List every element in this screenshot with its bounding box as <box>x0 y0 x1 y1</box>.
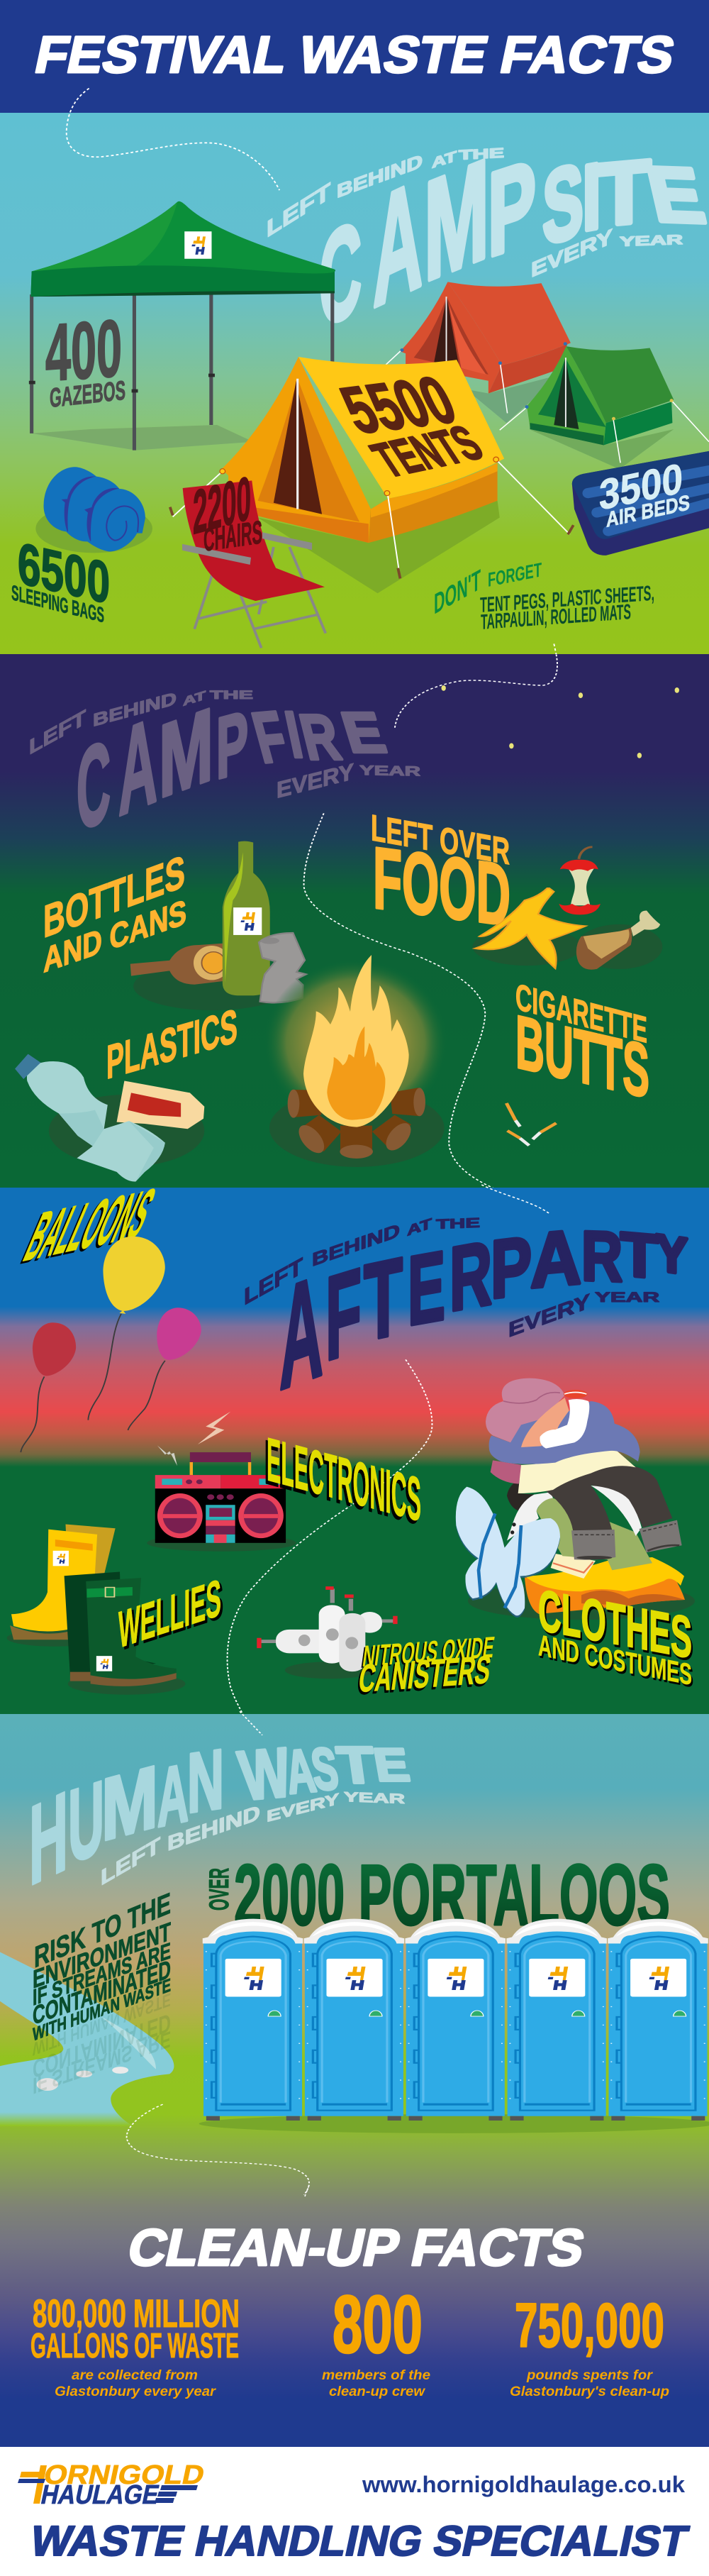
label: 6500 sleeping bags <box>11 530 110 628</box>
heading: human waste left behind every year: A <box>281 1737 320 1807</box>
icon: boombox <box>147 1412 296 1552</box>
icon: crushed plastics <box>15 1054 204 1182</box>
label: 3500 air beds: AIR BEDS <box>606 491 690 532</box>
stat: 800,000 million gallons: are collected from <box>72 2368 198 2383</box>
heading: left behind at the afterparty every year: LEFT <box>244 1253 303 1310</box>
dotted trail <box>127 1711 309 2195</box>
heading: left behind at the afterparty every year: A <box>530 1214 581 1305</box>
heading: left behind at the campsite every year: P <box>488 135 536 282</box>
heading: left behind at the campfire every year: P <box>216 693 248 798</box>
label: 5500 tents <box>330 363 493 487</box>
stat: 800 crew: clean-up crew <box>329 2384 425 2399</box>
label: over 2000 portaloos: OVER <box>204 1868 235 1911</box>
heading: left behind at the afterparty every year: Y <box>656 1223 688 1286</box>
heading: left behind at the campsite every year: AT <box>432 148 457 172</box>
icon: banana peel <box>473 888 586 968</box>
label: bottles and cans <box>43 846 186 980</box>
heading: left behind at the afterparty every year: THE <box>436 1216 480 1232</box>
stat: 800,000 million gallons: GALLONS OF WASTE <box>30 2327 239 2365</box>
panel: human waste <box>0 1711 709 2206</box>
heading: left behind at the campsite every year: EVERY <box>531 225 613 282</box>
dotted trail <box>304 654 557 1191</box>
stat: 800 crew: 800 <box>333 2279 423 2370</box>
heading: human waste left behind every year: A <box>157 1746 189 1845</box>
stat: 750,000 pounds: pounds spents for <box>526 2368 654 2383</box>
heading: left behind at the afterparty every year: R <box>450 1222 492 1331</box>
label: nitrous oxide canisters: CANISTERS <box>356 1647 493 1701</box>
heading: left behind at the afterparty every year: T <box>364 1234 403 1364</box>
heading: left behind at the campsite every year: THE <box>459 146 504 163</box>
heading: left behind at the campsite every year: M <box>424 128 489 311</box>
heading: left behind at the afterparty every year: A <box>279 1244 323 1421</box>
illustrations: stream <box>0 1711 309 2195</box>
illustrations: campfire <box>15 654 679 1191</box>
label: nitrous oxide canisters: NITROUS OXIDE <box>359 1632 495 1674</box>
heading: left behind at the campfire every year: M <box>159 685 213 820</box>
heading: human waste left behind every year: S <box>308 1736 342 1802</box>
label: 6500 sleeping bags: SLEEPING BAGS <box>11 580 104 628</box>
panel: campsite: CHAIRS <box>203 514 262 558</box>
icon: deck chair <box>182 480 325 648</box>
icon: green wellies <box>65 1571 185 1695</box>
heading: left behind at the afterparty every year: EVERY <box>508 1290 590 1342</box>
label: plastics: PLASTICS <box>106 999 238 1090</box>
icon: crushed can <box>259 933 306 1002</box>
icon: red tent <box>384 282 571 423</box>
stat: 800,000 million gallons <box>30 2291 240 2399</box>
text block: risk to the environment: RISK TO THE <box>34 1886 171 1975</box>
heading: left behind at the campfire every year: AT <box>183 687 206 709</box>
stat: 800 crew <box>322 2279 430 2399</box>
label: don't forget <box>434 558 654 634</box>
heading: left behind at the campfire every year: E <box>335 702 392 765</box>
icon: yellow wellies <box>7 1524 116 1647</box>
icon: green tent <box>500 342 709 469</box>
stat: 800,000 million gallons: Glastonbury every year <box>55 2384 217 2399</box>
logo: hornigold haulage: ORNIGOLD <box>41 2460 207 2490</box>
label: left over food: FOOD <box>373 829 510 945</box>
heading: left behind at the campsite every year: LEFT <box>267 177 330 243</box>
icon: portaloo 1 <box>203 1919 303 2121</box>
panel: campsite <box>0 89 709 656</box>
panel: afterparty <box>0 1173 709 1714</box>
text block: risk to the environment: CONTAMINATED <box>33 1954 171 2030</box>
heading: left behind at the campfire every year: EVERY <box>277 758 354 803</box>
heading: human waste left behind every year: EVERY <box>267 1790 339 1825</box>
tagline: WASTE HANDLING SPECIALIST <box>26 2517 693 2565</box>
icon: chicken leg <box>576 911 662 970</box>
heading: left behind at the campfire every year: THE <box>210 688 253 702</box>
label: left over food: LEFT OVER <box>371 807 510 873</box>
panel: footer <box>0 2447 709 2576</box>
label: 400 gazebos <box>45 304 125 414</box>
label: cigarette butts <box>515 976 649 1114</box>
label: bottles and cans: AND CANS <box>43 892 186 980</box>
label: nitrous oxide canisters: NITROUS OXIDE <box>361 1630 496 1673</box>
heading: clean-up facts: CLEAN-UP FACTS <box>123 2218 590 2277</box>
heading: human waste left behind every year: T <box>334 1736 379 1794</box>
heading: left behind at the campfire every year: I <box>279 698 308 771</box>
panel: afterparty: WELLIES <box>118 1568 221 1659</box>
panel: afterparty: WELLIES <box>121 1570 223 1662</box>
icon: pile of clothes <box>456 1378 695 1620</box>
icon: balloons <box>21 1237 201 1452</box>
text block: risk to the environment: IF STREAMS ARE <box>33 1937 171 2011</box>
heading: left behind at the afterparty every year <box>244 1214 688 1421</box>
label: don't forget: DON'T <box>434 563 481 621</box>
heading: left behind at the campfire every year: R <box>294 702 347 773</box>
icon: bottles <box>130 841 291 1010</box>
label: 2200 chairs <box>193 463 262 558</box>
heading: left behind at the afterparty every year: P <box>491 1219 532 1316</box>
heading: human waste left behind every year <box>29 1732 413 1910</box>
logo: hornigold haulage <box>18 2460 207 2510</box>
label: nitrous oxide canisters: CANISTERS <box>354 1649 492 1703</box>
text reflection in stream: CONTAMINATED <box>33 2008 171 2084</box>
label: left over food <box>371 807 510 945</box>
dotted trail end <box>305 2185 309 2196</box>
label: nitrous oxide canisters <box>354 1630 496 1703</box>
heading: human waste left behind every year: M <box>101 1747 158 1860</box>
dotted trail end <box>554 643 557 656</box>
icon: stars <box>441 685 679 758</box>
heading: left behind at the campsite every year: C <box>319 192 362 356</box>
logo: hornigold haulage: HAULAGE <box>38 2480 162 2510</box>
heading: human waste left behind every year: LEFT <box>101 1833 160 1890</box>
header band <box>0 0 709 113</box>
icon: cigarette butts <box>506 1103 556 1146</box>
icon: gazebo <box>29 201 335 450</box>
panel: afterparty: BALLOONS <box>15 1173 165 1277</box>
heading: left behind at the afterparty every year: R <box>581 1216 623 1296</box>
portaloos row <box>199 1919 709 2133</box>
label: 2200 chairs: 2200 <box>193 463 251 548</box>
icon: yellow tent <box>170 357 574 593</box>
icon: portaloo 2 <box>304 1919 404 2121</box>
text reflection in stream: IF STREAMS ARE <box>33 2026 171 2099</box>
label: 400 gazebos: GAZEBOS <box>50 376 125 414</box>
illustrations: afterparty <box>7 1185 549 1714</box>
stat: 750,000 pounds <box>510 2290 669 2399</box>
icon: nitrous oxide canisters <box>259 1588 396 1679</box>
heading: left behind at the campfire every year: F <box>245 696 295 778</box>
heading: left behind at the afterparty every year: E <box>408 1231 445 1347</box>
heading: left behind at the afterparty every year: F <box>325 1243 362 1386</box>
icon: portaloo 4 <box>506 1919 607 2121</box>
panel: afterparty: BALLOONS <box>13 1176 163 1279</box>
heading: left behind at the campsite every year: YEAR <box>620 233 683 250</box>
stat: 800 crew: members of the <box>322 2368 430 2383</box>
heading: left behind at the campsite every year <box>267 128 709 356</box>
label: 5500 tents: TENTS <box>362 416 493 487</box>
illustrations: campsite <box>29 89 709 656</box>
panel: clean-up facts <box>0 2185 709 2447</box>
heading: left behind at the afterparty every year: YEAR <box>595 1290 659 1305</box>
title: FESTIVAL WASTE FACTS <box>30 26 680 84</box>
label: 3500 air beds: 3500 <box>599 454 683 519</box>
dotted trail <box>67 89 279 190</box>
stat: 800,000 million gallons: 800,000 MILLION <box>33 2291 240 2335</box>
heading: left behind at the campsite every year: BEHIND <box>337 150 423 202</box>
heading: left behind at the campsite every year: I <box>582 143 601 250</box>
label: balloons <box>13 1173 165 1279</box>
heading: left behind at the afterparty every year: AT <box>407 1215 432 1239</box>
heading: left behind at the campsite every year: E <box>640 152 709 239</box>
heading: human waste left behind every year: U <box>68 1758 104 1885</box>
heading: left behind at the campfire every year: YEAR <box>359 763 420 780</box>
heading: left behind at the campfire every year: LEFT <box>29 705 86 760</box>
heading: left behind at the campsite every year: T <box>597 143 651 245</box>
label: don't forget: FORGET <box>488 558 542 591</box>
heading: left behind at the afterparty every year: T <box>620 1220 659 1292</box>
heading: left behind at the campfire every year: BEHIND <box>93 689 177 731</box>
icon: air bed <box>572 451 709 555</box>
label: 6500 sleeping bags: 6500 <box>18 530 110 617</box>
heading: human waste left behind every year: E <box>370 1739 413 1791</box>
text block: risk to the environment <box>33 1886 171 2045</box>
label: 400 gazebos: 400 <box>45 304 122 399</box>
heading: left behind at the campsite every year: A <box>373 146 423 340</box>
heading: human waste left behind every year: YEAR <box>344 1790 405 1807</box>
panel: campfire <box>0 654 709 1191</box>
heading: left behind at the afterparty every year: BEHIND <box>312 1220 400 1271</box>
icon: apple core <box>559 847 601 914</box>
label: 5500 tents: 5500 <box>330 363 468 447</box>
text reflection in stream <box>33 1989 171 2099</box>
text reflection in stream: WITH HUMAN WASTE <box>33 1989 171 2060</box>
heading: left behind at the campsite every year: S <box>542 141 584 267</box>
heading: left behind at the campfire every year <box>29 685 420 856</box>
heading: human waste left behind every year: BEHIND <box>167 1801 260 1856</box>
panel: afterparty: ELECTRONICS <box>264 1427 419 1537</box>
label: bottles and cans: BOTTLES <box>43 846 185 949</box>
panel: afterparty: ELECTRONICS <box>267 1424 421 1535</box>
icon: sleeping bag <box>35 467 152 553</box>
stat: 750,000 pounds: Glastonbury's clean-up <box>510 2384 669 2399</box>
heading: human waste left behind every year: W <box>233 1733 297 1815</box>
label: electronics <box>264 1424 421 1537</box>
icon: portaloo 5 <box>608 1919 708 2121</box>
heading: human waste left behind every year: H <box>29 1767 68 1910</box>
icon: stream <box>0 1952 174 2126</box>
heading: left behind at the campfire every year: C <box>77 715 111 856</box>
label: wellies <box>118 1568 223 1662</box>
heading: human waste left behind every year: N <box>187 1732 224 1831</box>
dotted trail <box>228 1185 549 1714</box>
text block: risk to the environment: WITH HUMAN WASTE <box>33 1974 171 2045</box>
website url: www.hornigoldhaulage.co.uk <box>362 2472 685 2497</box>
heading: left behind at the campfire every year: A <box>118 690 157 842</box>
icon: campfire <box>264 955 448 1167</box>
icon: portaloo 3 <box>405 1919 506 2121</box>
text block: risk to the environment: ENVIRONMENT <box>33 1916 171 1994</box>
